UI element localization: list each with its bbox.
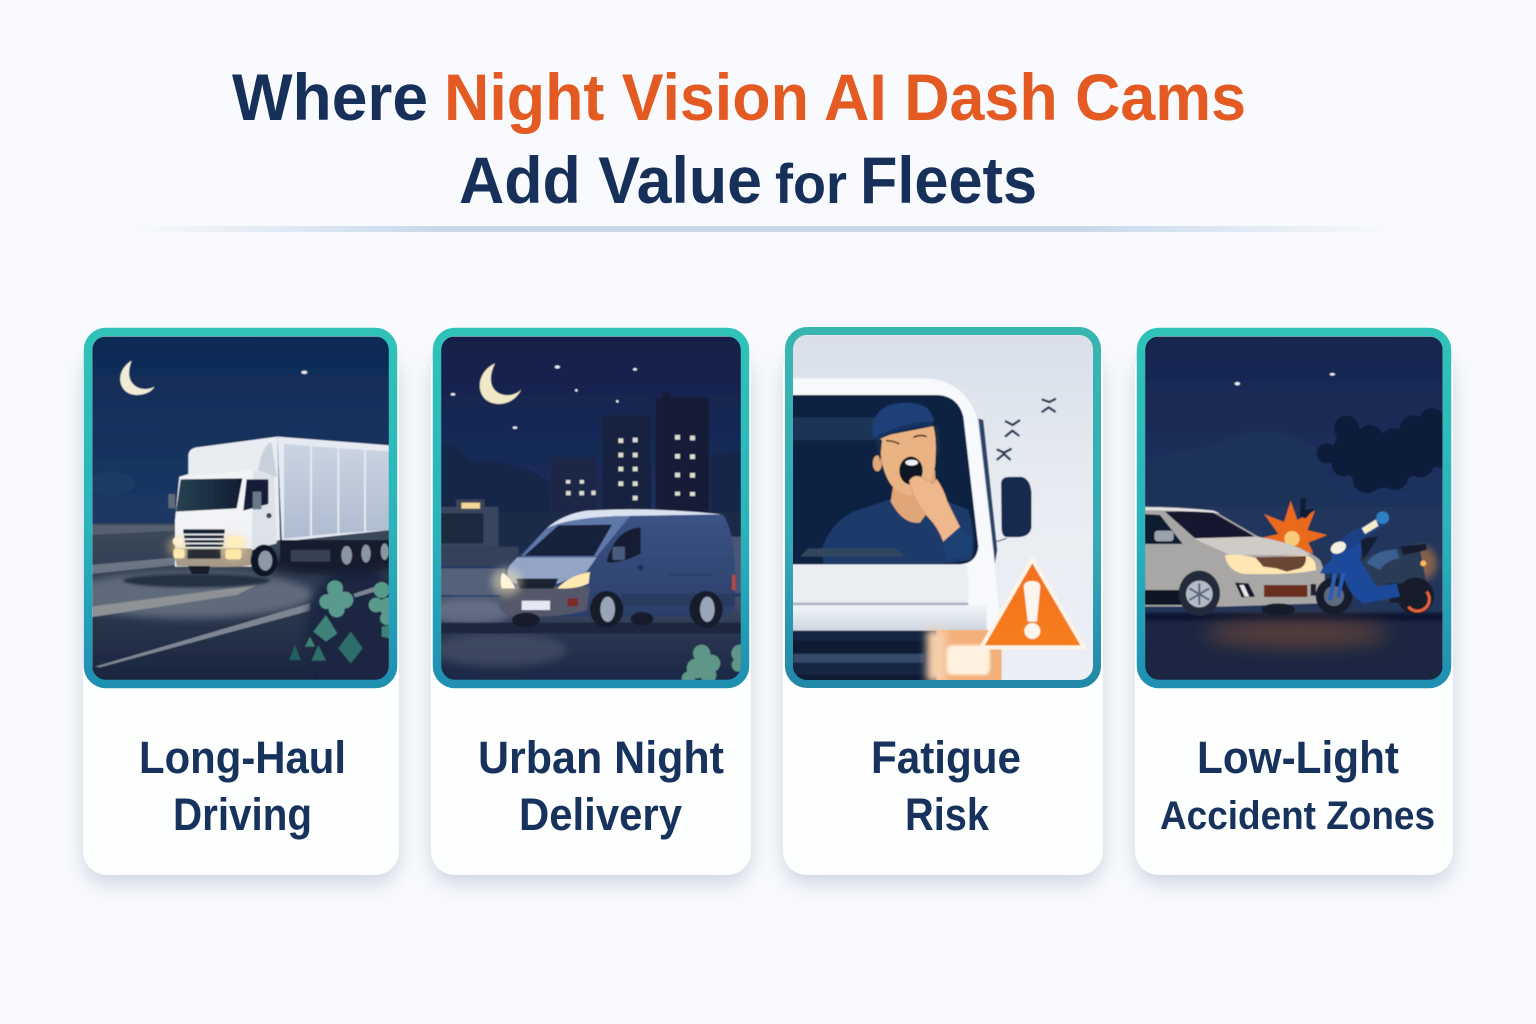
label: Low-Light — [1197, 732, 1399, 783]
image frame — [88, 332, 393, 684]
bushes — [289, 580, 398, 663]
impact burst — [1263, 498, 1327, 553]
bushes — [681, 644, 741, 680]
title line 2: for — [775, 152, 847, 215]
buildings — [551, 392, 709, 515]
mirror — [997, 477, 1031, 542]
ground — [1145, 618, 1442, 680]
scene: car and scooter collision — [1142, 333, 1456, 683]
driver — [800, 402, 974, 563]
title line 1: Where — [232, 60, 428, 134]
scene: yawning driver in cab — [790, 333, 1097, 683]
title line 2: Add Value — [459, 143, 762, 217]
grille — [790, 631, 937, 683]
label: Fatigue — [871, 732, 1021, 783]
card background — [83, 345, 399, 875]
panel: urban night delivery — [427, 332, 751, 875]
label: Urban Night — [478, 732, 724, 783]
label: Driving — [173, 789, 312, 840]
car — [1142, 507, 1325, 616]
card background — [1135, 345, 1453, 875]
title — [232, 60, 1246, 217]
van body — [499, 510, 735, 617]
truck cab — [180, 437, 280, 547]
sleep marks — [997, 399, 1056, 460]
label — [478, 732, 724, 840]
stars — [451, 365, 637, 429]
image frame — [1141, 332, 1447, 684]
label — [1160, 732, 1435, 838]
cab body — [793, 378, 999, 630]
panel: long-haul driving — [67, 332, 407, 875]
scene: delivery van in city — [427, 333, 749, 685]
card background — [431, 345, 751, 875]
label: Delivery — [519, 789, 682, 840]
window — [790, 395, 978, 564]
scene: truck at night — [92, 336, 389, 680]
warning triangle — [981, 559, 1084, 647]
label: Long-Haul — [139, 732, 346, 783]
star — [301, 371, 307, 374]
moon — [120, 361, 155, 395]
image frame — [437, 332, 745, 684]
stars — [1235, 373, 1335, 385]
label — [139, 732, 346, 840]
title line 2: Fleets — [860, 143, 1037, 217]
dark tree — [1317, 408, 1456, 493]
title line 1: Night Vision AI Dash Cams — [444, 60, 1246, 134]
truck headlights — [167, 534, 247, 559]
label — [871, 732, 1021, 840]
panel: low-light accident zones — [1135, 332, 1456, 875]
card background — [783, 345, 1103, 875]
image frame — [789, 331, 1097, 684]
scooter — [1316, 511, 1437, 614]
headlight glow — [927, 630, 1002, 682]
panel: fatigue risk — [783, 331, 1103, 875]
truck trailer — [277, 437, 390, 542]
label: Accident Zones — [1160, 794, 1435, 838]
van headlights — [492, 568, 590, 596]
moon — [480, 363, 521, 404]
label: Risk — [905, 789, 990, 840]
